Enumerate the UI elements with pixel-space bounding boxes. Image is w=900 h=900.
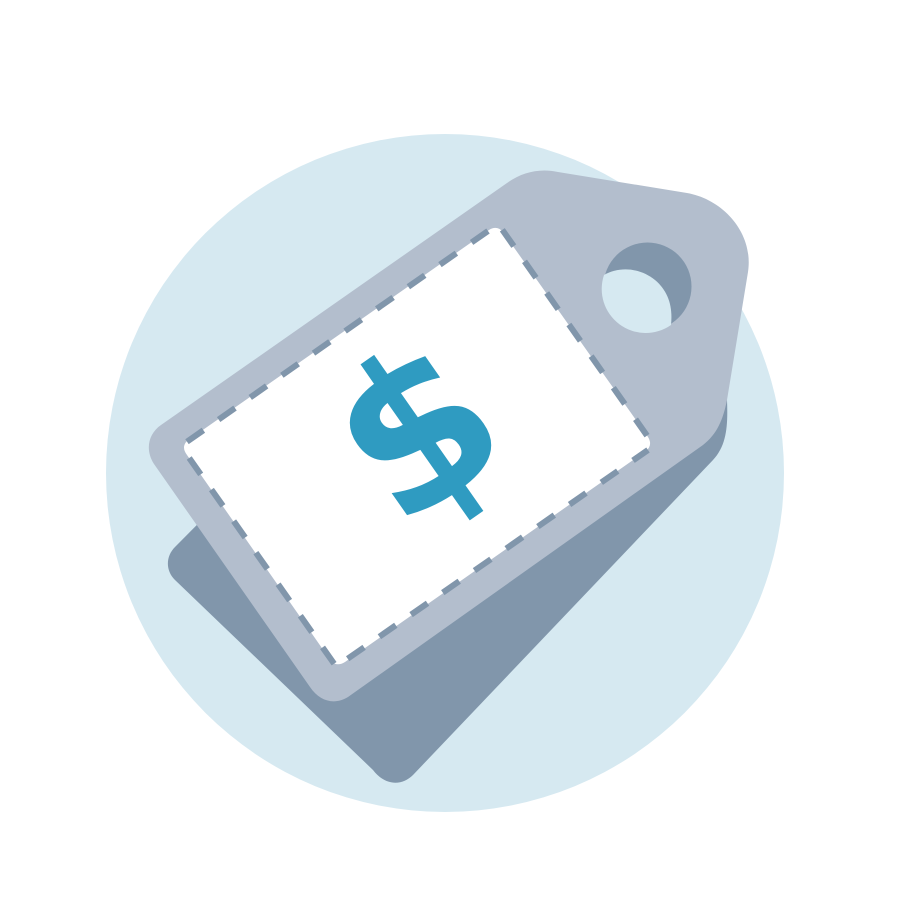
dashed border — [187, 230, 648, 665]
front tag — [149, 170, 749, 701]
hole shadow — [604, 242, 692, 330]
tag hole — [602, 242, 692, 333]
white label — [184, 228, 650, 664]
background circle — [106, 134, 784, 812]
back tag shadow — [168, 320, 727, 783]
dollar sign: $ — [287, 289, 547, 573]
hole opening — [602, 269, 671, 333]
